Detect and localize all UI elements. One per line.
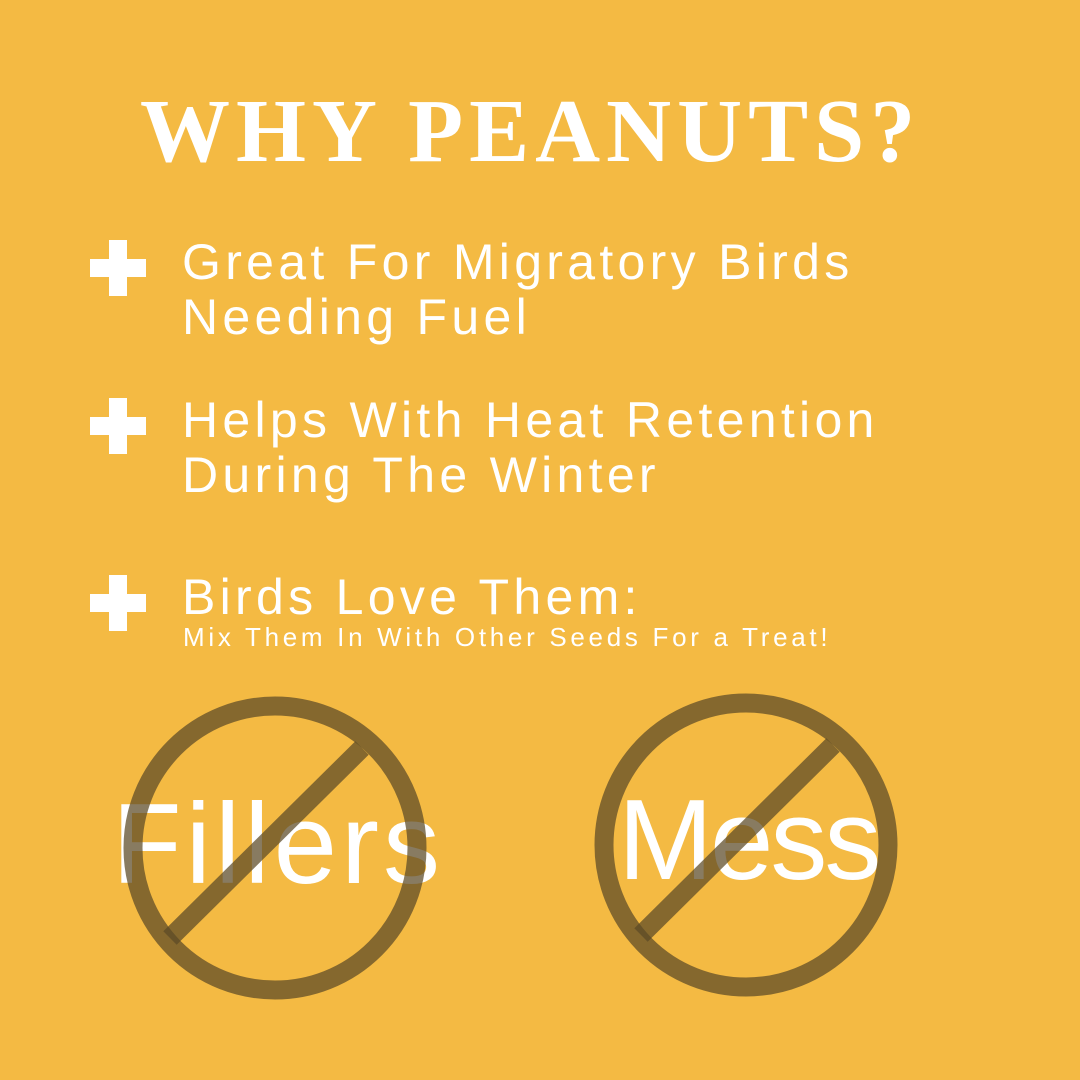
icon: plus [90, 575, 146, 631]
bullet 3 [90, 569, 831, 652]
text: Helps With Heat Retention [182, 392, 879, 448]
title: WHY PEANUTS? [140, 82, 921, 181]
text [182, 234, 854, 345]
icon: plus [90, 398, 146, 454]
text: Birds Love Them: [182, 569, 642, 625]
text: Great For Migratory Birds [182, 234, 854, 290]
subtext: Mix Them In With Other Seeds For a Treat! [183, 622, 831, 652]
text [182, 392, 879, 503]
label: Fillers: Fillers [112, 781, 444, 908]
text: During The Winter [182, 447, 660, 503]
bullet 1 [90, 234, 854, 345]
text: Needing Fuel [182, 289, 531, 345]
label: Mess: Mess [618, 777, 878, 904]
icon: plus [90, 240, 146, 296]
bullet 2 [90, 392, 879, 503]
